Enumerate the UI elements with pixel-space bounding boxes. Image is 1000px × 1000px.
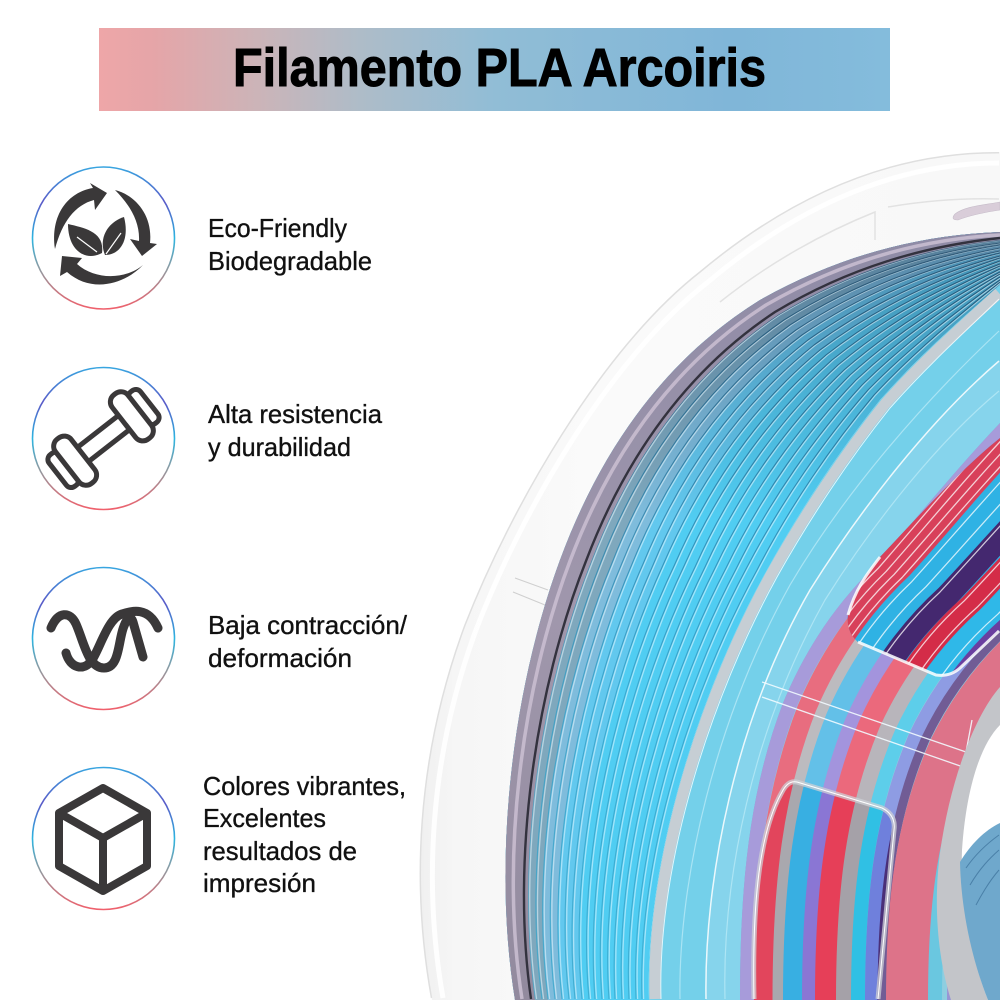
icon: dumbbell — [32, 368, 174, 510]
feature: eco-friendly — [32, 167, 372, 309]
flange frost over strands — [740, 423, 1000, 1000]
icon: warped lines — [32, 568, 174, 710]
feature: low warping — [32, 568, 408, 710]
visible strands behind the flange spokes — [740, 423, 1000, 1000]
title banner — [99, 28, 890, 111]
text: eco-friendly: Biodegradable — [208, 246, 372, 276]
icon: cube — [32, 768, 174, 910]
text: strength — [208, 399, 383, 462]
text: strength: y durabilidad — [208, 432, 351, 462]
text: eco-friendly — [208, 213, 372, 276]
text: low warping: Baja contracción/ — [208, 610, 408, 640]
text: vibrant colours: Excelentes — [203, 803, 326, 833]
feature: strength — [32, 368, 383, 510]
text: vibrant colours — [203, 771, 406, 898]
feature: vibrant colours — [32, 768, 406, 910]
text: vibrant colours: impresión — [203, 868, 316, 898]
filament winding: gray-purple outer band — [505, 232, 1000, 1000]
text: vibrant colours: Colores vibrantes, — [203, 771, 406, 801]
spool outer flange — [420, 152, 1000, 1000]
icon: recycling arrows and leaves — [32, 167, 174, 309]
text: strength: Alta resistencia — [208, 399, 383, 429]
central hub ring and hole — [937, 687, 1000, 1000]
translucent near flange: light blue band — [649, 285, 1000, 1000]
illustration: rainbow filament spool — [420, 152, 1000, 1000]
text: low warping — [208, 610, 408, 673]
title: Filamento PLA Arcoiris — [233, 38, 766, 98]
embossed lines on spoke — [762, 682, 972, 768]
text: eco-friendly: Eco-Friendly — [208, 213, 347, 243]
text: vibrant colours: resultados de — [203, 836, 357, 866]
filament winding: cyan strands — [505, 232, 1000, 1000]
upper window strands — [848, 438, 1000, 676]
window edges — [754, 557, 999, 999]
filament tail — [953, 202, 1000, 220]
text: low warping: deformación — [208, 643, 352, 673]
